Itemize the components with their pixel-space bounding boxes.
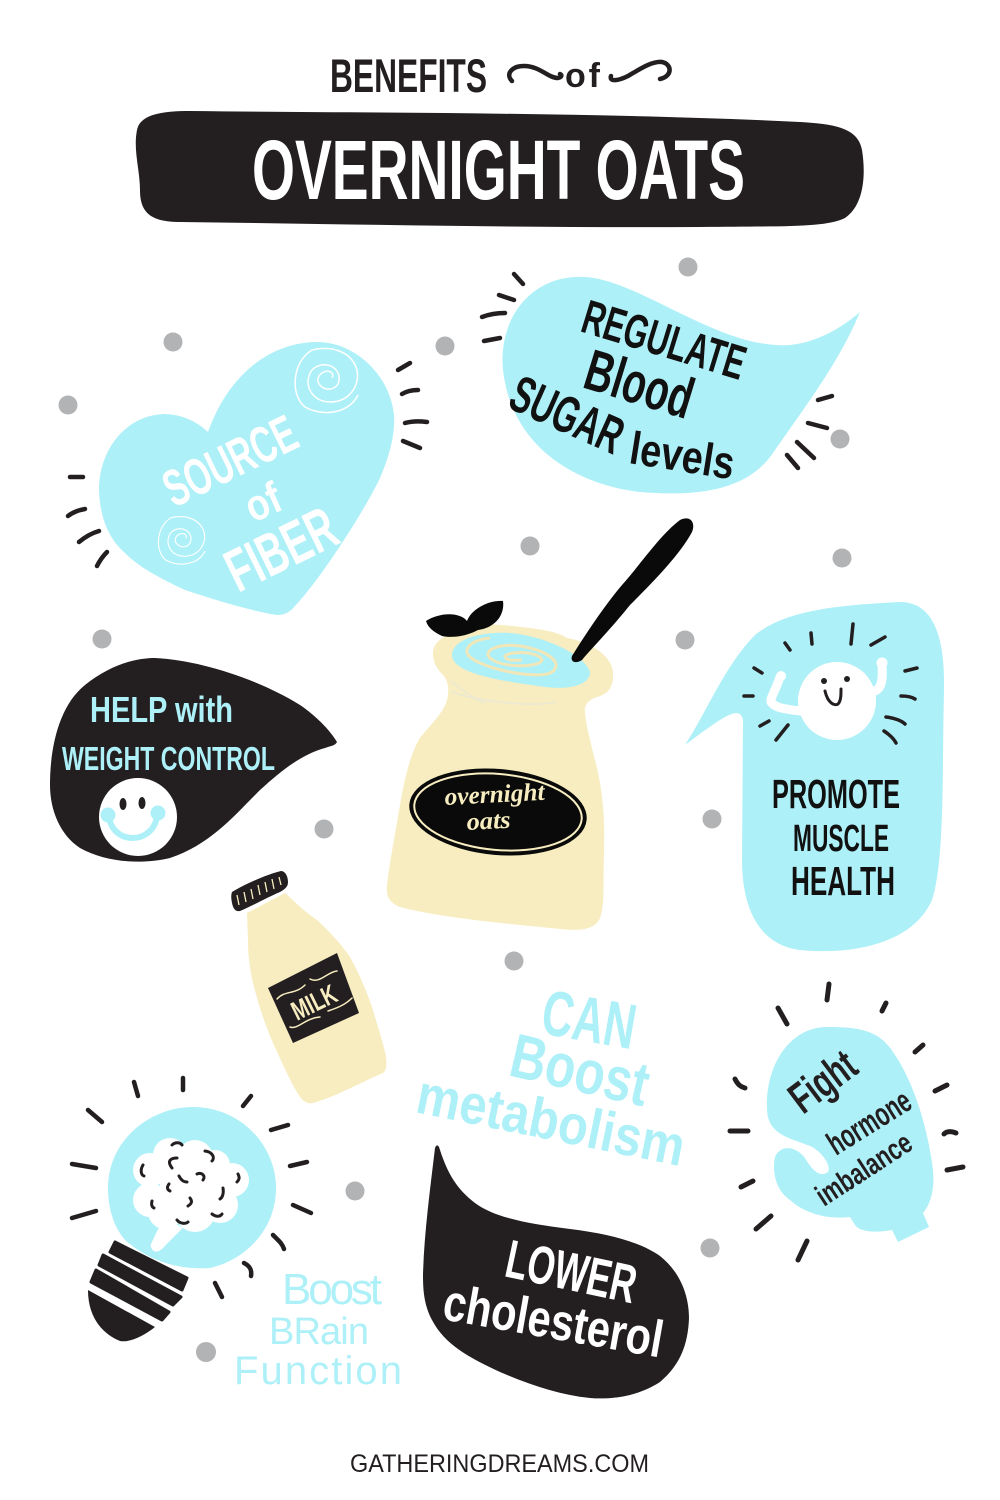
icon: flexing smiley (744, 624, 917, 743)
swirl in oats (467, 638, 556, 675)
panel: source of fiber heart: SOURCE (154, 404, 307, 519)
panel: fight hormone imbalance: hormone (820, 1082, 918, 1162)
panel: source of fiber heart: FIBER (214, 494, 348, 605)
text: boost brain function (234, 1265, 402, 1393)
bulb base stripes (88, 1242, 187, 1341)
panel: regulate blood sugar bubble (501, 277, 860, 493)
title line: benefits of: of (565, 57, 601, 95)
footer: website: GATHERINGDREAMS.COM (350, 1450, 649, 1478)
icon: milk bottle (231, 871, 386, 1103)
leaves (426, 601, 503, 637)
panel: promote muscle health bubble: MUSCLE (793, 818, 889, 860)
panel: source of fiber heart: of (237, 473, 289, 532)
icon: overnight oats jar: overnight (444, 779, 546, 811)
bulb rays (72, 1078, 311, 1297)
brain cloud (133, 1138, 249, 1251)
icon: smiley (99, 778, 177, 856)
panel: fight hormone imbalance: Fight (780, 1040, 867, 1123)
panel: source of fiber heart (99, 342, 394, 615)
panel: weight control bubble: WEIGHT CONTROL (62, 740, 275, 777)
icon: brain light bulb (72, 1078, 311, 1341)
bubble ticks (482, 274, 832, 468)
panel: promote muscle health bubble: PROMOTE (772, 771, 900, 817)
icon: overnight oats jar (387, 518, 693, 930)
title line: benefits of (330, 49, 670, 102)
text: boost brain function: Function (234, 1349, 402, 1393)
jar label (406, 761, 590, 863)
spoon (572, 518, 693, 662)
panel: promote muscle health bubble (685, 602, 944, 951)
panel: regulate blood sugar bubble: SUGAR (501, 365, 633, 466)
icon: milk bottle: MILK (286, 979, 342, 1026)
icon: overnight oats jar: oats (466, 807, 511, 836)
text: boost brain function: Boost (282, 1265, 382, 1314)
panel: fight hormone imbalance: imbalance (810, 1126, 918, 1213)
panel: weight control bubble: HELP with (90, 689, 233, 730)
jar contents (452, 633, 590, 688)
text: boost brain function: BRain (269, 1311, 369, 1353)
grey decorative dots (58, 258, 852, 1362)
panel: fight hormone imbalance (730, 984, 963, 1260)
title banner (136, 111, 864, 227)
text: can boost metabolism: metabolism (412, 1062, 691, 1178)
panel: regulate blood sugar bubble: levels (626, 422, 738, 489)
text: can boost metabolism: CAN (537, 976, 642, 1063)
panel: lower cholesterol bubble (423, 1145, 689, 1398)
text: can boost metabolism: Boost (504, 1021, 656, 1120)
title banner: OVERNIGHT OATS (252, 123, 745, 217)
panel: lower cholesterol bubble: LOWER (501, 1229, 642, 1315)
title line: benefits of: BENEFITS (330, 49, 487, 102)
panel: regulate blood sugar bubble: REGULATE (576, 291, 752, 391)
text: can boost metabolism (412, 976, 691, 1178)
heart ticks (68, 363, 427, 566)
panel: promote muscle health bubble: HEALTH (791, 858, 895, 904)
panel: regulate blood sugar bubble: Blood (577, 337, 701, 432)
panel: lower cholesterol bubble: cholesterol (439, 1274, 668, 1369)
panel: weight control bubble (50, 658, 337, 862)
